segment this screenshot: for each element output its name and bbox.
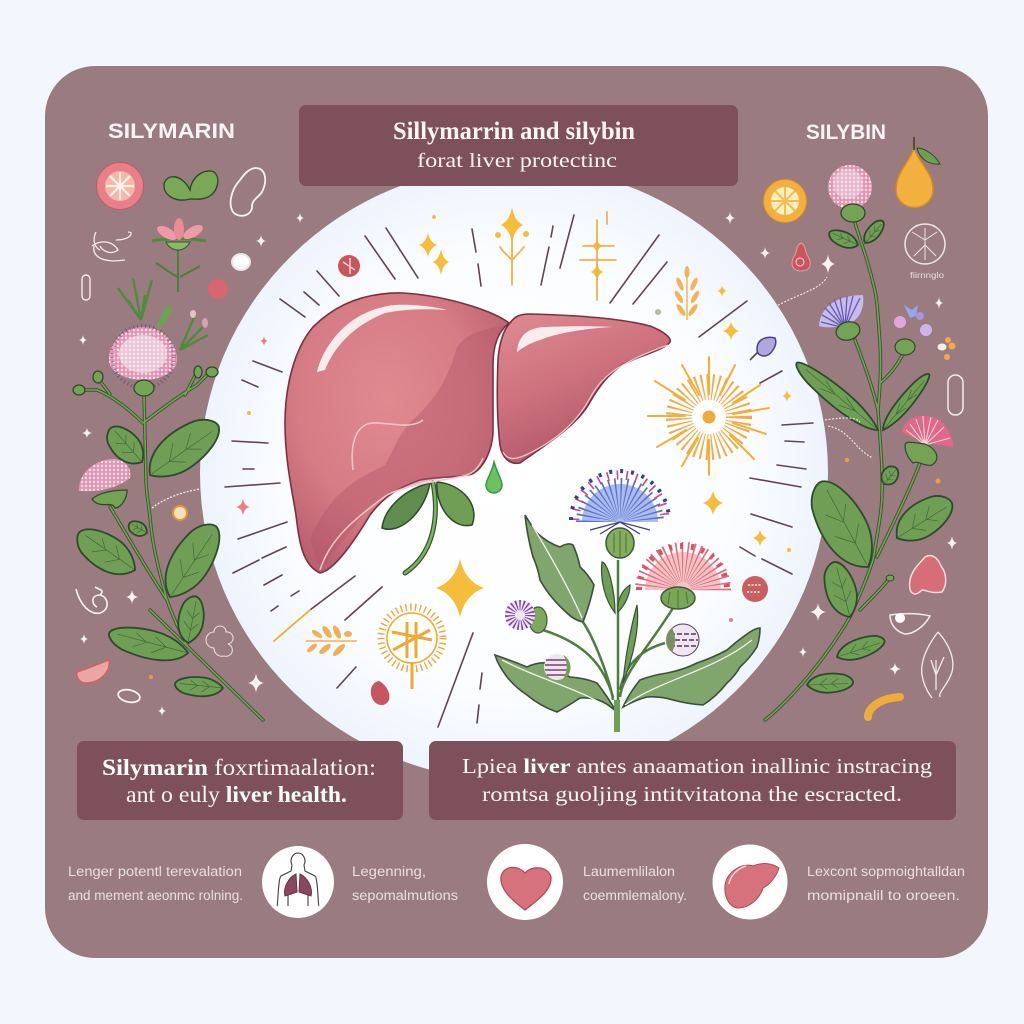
left heading: SILYMARIN <box>108 120 235 143</box>
icon: wheat top <box>673 266 701 320</box>
icon: orange slice <box>764 180 806 222</box>
radiating dashes <box>225 215 813 727</box>
icon: purple bud <box>750 337 776 360</box>
center thistle plant <box>495 471 760 732</box>
red thistle calyx <box>661 587 695 609</box>
text column three: coemmlemalony. <box>583 888 687 903</box>
highlight <box>317 305 447 372</box>
lobe shading <box>310 325 505 570</box>
title: Sillymarrin and silybin <box>393 118 635 145</box>
icon: green drop <box>486 462 502 493</box>
buds on left plant <box>73 366 218 395</box>
liver illustration <box>285 293 670 573</box>
icon: white ring <box>232 254 250 270</box>
sun medallion bottom <box>381 607 443 689</box>
sun burst right <box>648 357 769 475</box>
right plant leaves <box>800 472 886 579</box>
callout left <box>77 741 403 820</box>
small lobe edge <box>503 345 668 459</box>
small white sparkles right <box>725 212 957 675</box>
icon: twig <box>180 310 208 350</box>
icon: pink organ <box>910 556 946 594</box>
icon: tomato slice <box>96 162 144 210</box>
icon: cloud outline <box>206 626 233 656</box>
icon: wheat bottom <box>306 624 357 658</box>
text column four: momipnalil to oroeen. <box>807 888 960 903</box>
icon: green seed <box>164 171 218 200</box>
icon: liver circle <box>712 844 788 920</box>
icon: leaf outline <box>922 632 953 698</box>
right heading: SILYBIN <box>806 121 886 144</box>
left plant <box>69 162 304 720</box>
icon: pink flower sprout <box>152 218 206 292</box>
right plant <box>725 137 963 720</box>
tiny caption: fiirnnglo <box>910 271 945 280</box>
text column four: Lexcont sopmoightalldan <box>807 864 965 879</box>
right bud <box>886 575 894 581</box>
blue thistle calyx <box>606 528 634 558</box>
golden ornaments <box>500 212 616 300</box>
icon: rounded outline <box>82 275 90 300</box>
icon: yellow pear drop <box>896 137 940 208</box>
leaf bottom-left <box>495 655 617 713</box>
dotted trails right <box>775 277 873 458</box>
icon: white doodle <box>92 232 131 261</box>
orange dots right <box>845 458 940 484</box>
central white circle <box>200 165 828 781</box>
icon: lung ring <box>905 224 945 264</box>
header banner <box>299 105 738 186</box>
liver vein <box>352 420 423 470</box>
subtitle: forat liver protectinc <box>417 150 617 172</box>
callout left line one: Silymarin foxrtimaalation: <box>102 755 376 780</box>
small lobe highlight <box>517 326 613 352</box>
small liver lobe <box>497 314 670 463</box>
icon: outlined bean <box>231 168 265 216</box>
yellow star large <box>436 559 484 617</box>
purple buds <box>505 600 699 680</box>
leaves under liver <box>382 482 474 573</box>
left thistle lower <box>79 459 130 508</box>
icon: eye drop <box>890 613 930 634</box>
right thistle top <box>828 165 872 222</box>
yellow accents <box>247 207 792 552</box>
text column three: Laumemlilalon <box>583 864 675 879</box>
right plant stems <box>765 223 920 720</box>
icon: rounded outline right <box>948 375 963 415</box>
leaf bottom-right <box>623 628 760 707</box>
text column one <box>68 864 243 903</box>
left thistle top <box>109 326 177 396</box>
left plant stems <box>77 372 263 720</box>
purple thistle <box>819 295 863 343</box>
yellow dash segment <box>274 610 310 641</box>
stems <box>543 560 673 700</box>
text column four <box>807 864 965 903</box>
large liver lobe <box>285 293 509 573</box>
callout right line two: romtsa guoljing intitvitatona the escracted. <box>482 782 902 806</box>
narrow leaves <box>602 562 638 683</box>
dotted trail left <box>152 489 200 508</box>
blue thistle <box>571 471 669 534</box>
callout right <box>429 741 956 820</box>
icon: heart circle <box>487 844 563 920</box>
orange dot <box>149 675 153 679</box>
callout left line two: ant o euly liver health. <box>126 782 347 807</box>
left plant leaves <box>138 409 229 489</box>
small white sparkles left <box>79 213 304 716</box>
small purple flower <box>894 305 932 355</box>
icon: lungs circle <box>262 846 334 918</box>
icon: red ball <box>208 279 228 299</box>
icon: red slice <box>77 660 109 683</box>
icon: orange worm <box>868 697 900 717</box>
icon: grass sprig <box>118 278 152 320</box>
callout right line one: Lpiea liver antes anaamation inallinic instracing <box>462 754 932 778</box>
leaf upper-left <box>525 515 594 622</box>
icon: swirl outline <box>76 587 107 613</box>
text column two: Legenning, <box>352 864 426 879</box>
icon: red drop bottle <box>792 243 810 271</box>
red thistle <box>639 546 727 593</box>
right pink thistle <box>902 416 953 465</box>
leaf veins <box>502 525 752 712</box>
icon: red markers in circle <box>236 255 768 705</box>
icon: orange petals <box>938 337 956 360</box>
text column two: sepomalmutions <box>352 888 458 903</box>
liver fold <box>320 458 483 570</box>
text column one: and mement aeonmc rolning. <box>68 888 243 903</box>
icon: leaf drop <box>157 305 172 330</box>
icon: white oval <box>117 688 141 704</box>
icon: gold ring <box>173 506 187 520</box>
text column one: Lenger potentl terevalation <box>68 864 242 879</box>
text column two <box>352 864 458 903</box>
text column three <box>583 864 687 903</box>
